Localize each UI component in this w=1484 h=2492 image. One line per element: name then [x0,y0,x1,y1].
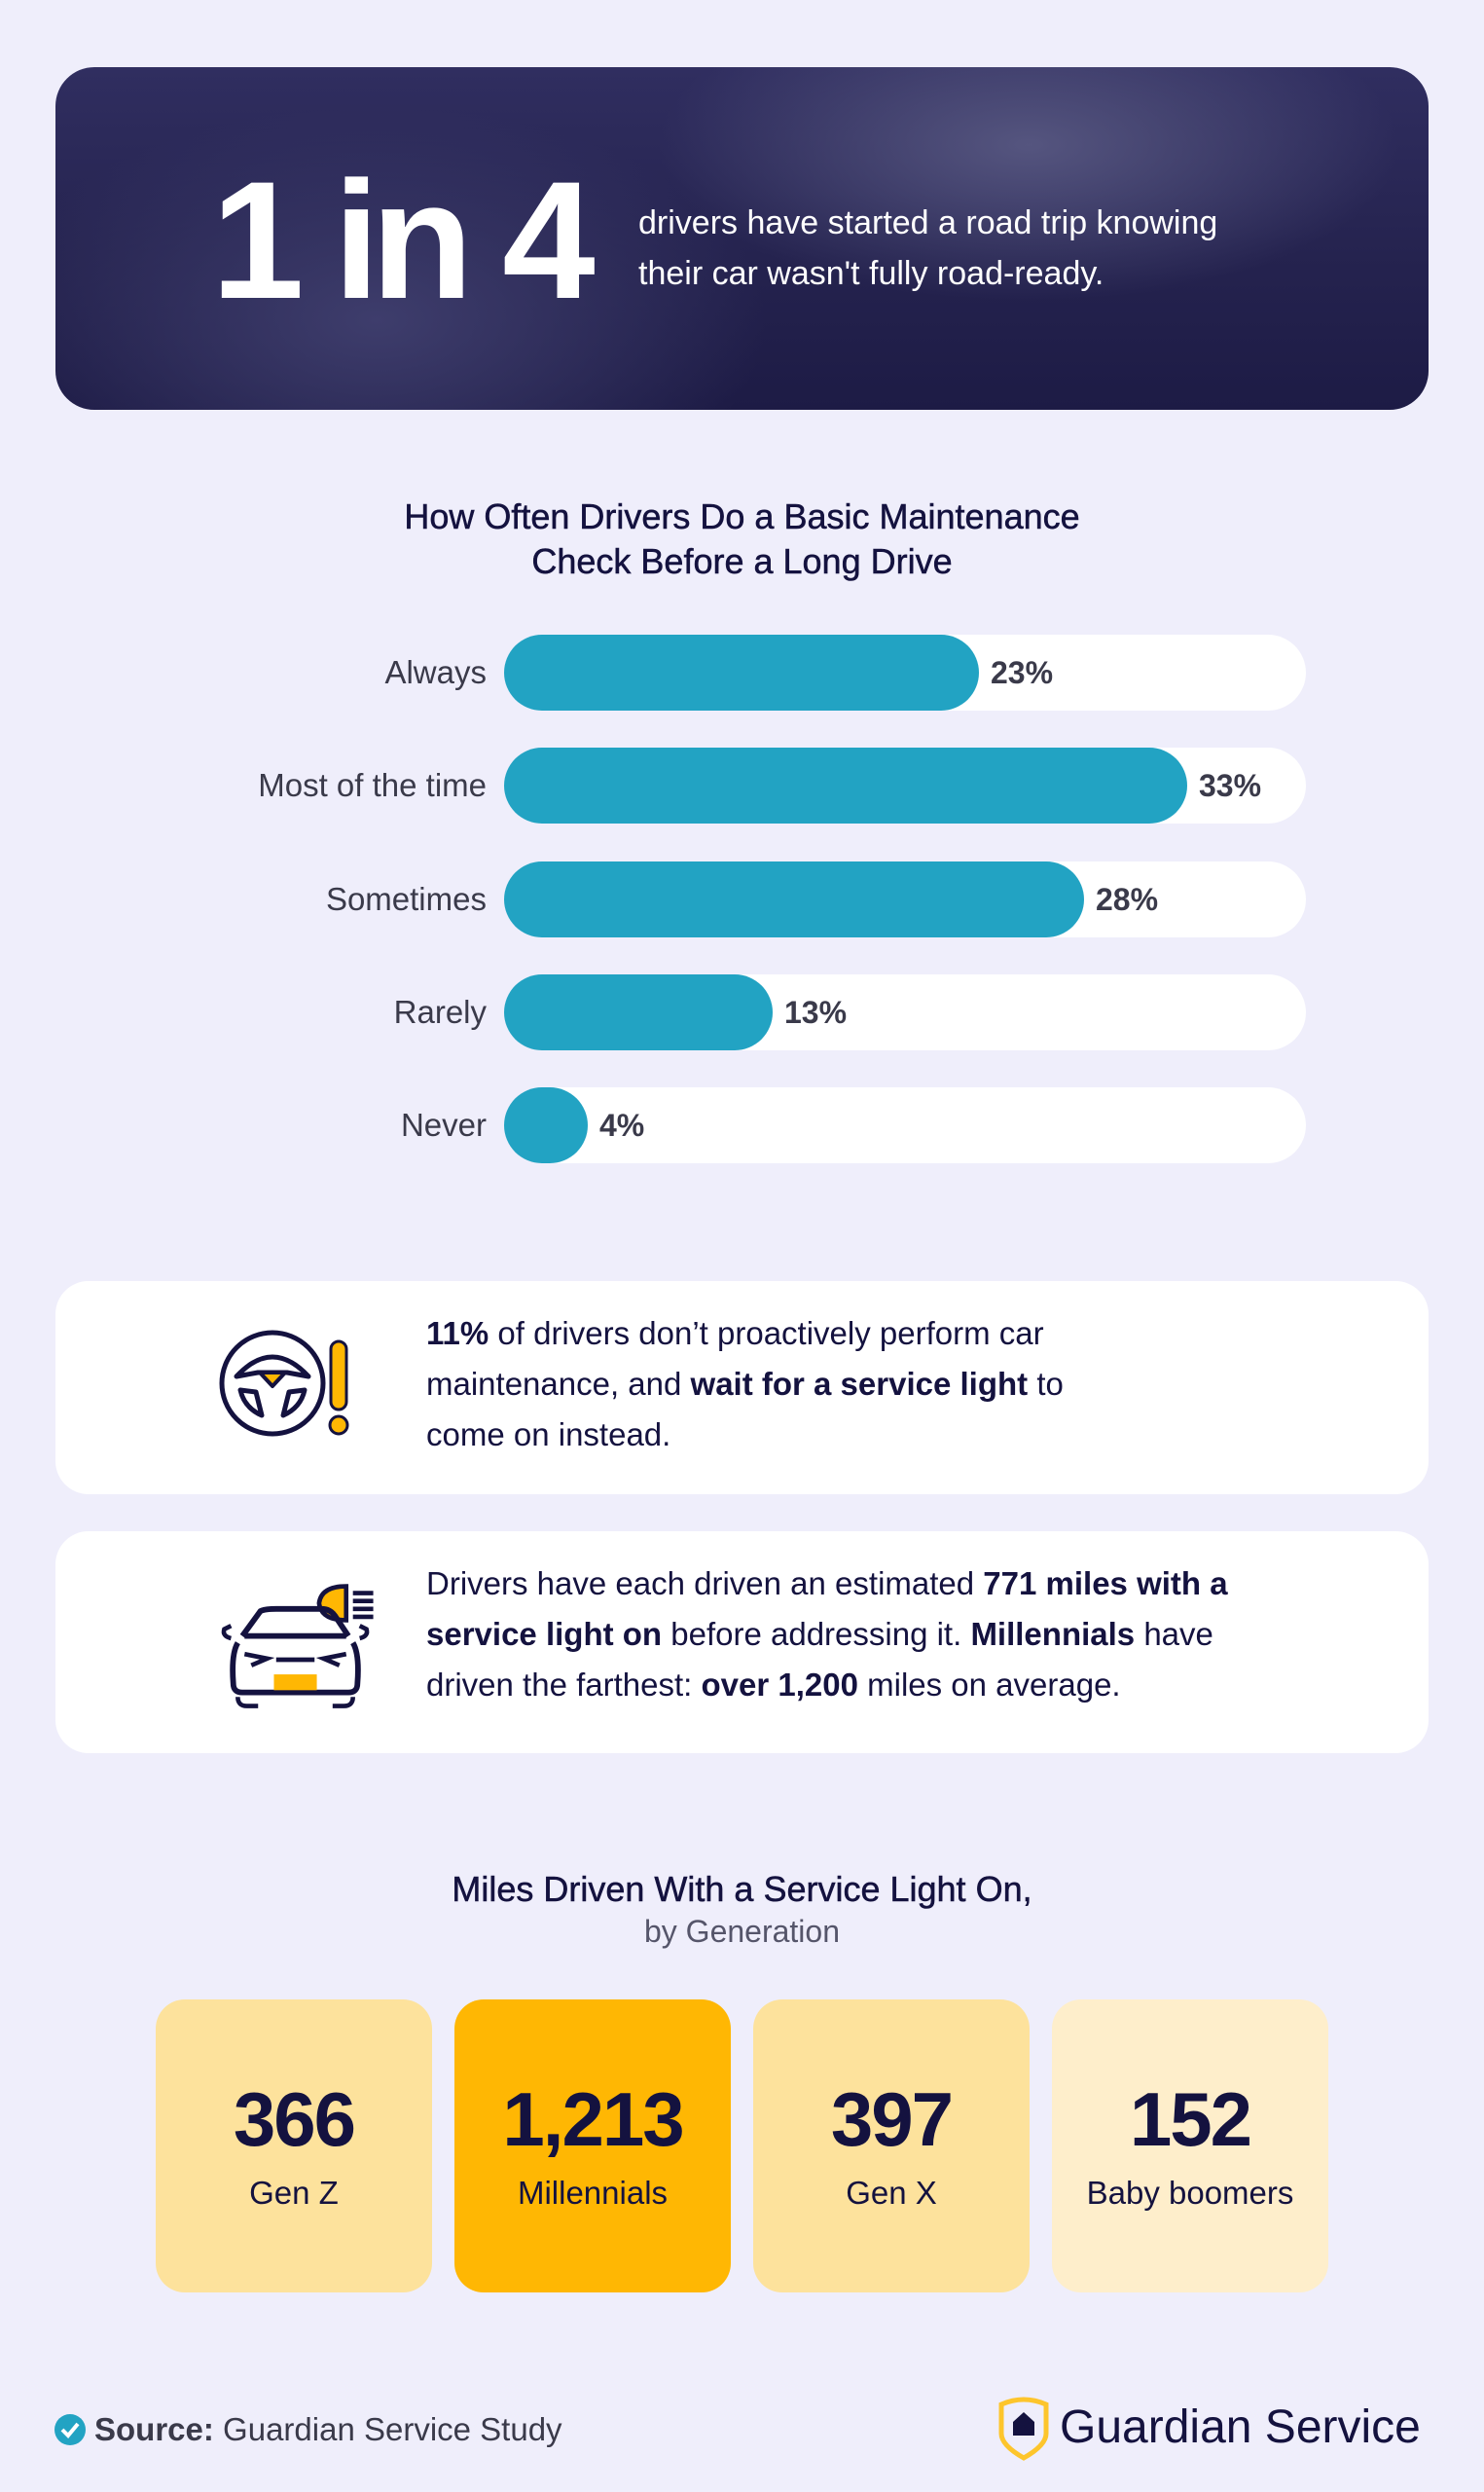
icon: steering wheel with exclamation [220,1330,348,1437]
logo [998,2397,1421,2461]
bar: Never: 4% [599,1108,644,1143]
card: service light [55,1281,1429,1494]
source: Source: Guardian Service Study [94,2411,562,2447]
bar: Always [384,635,1306,711]
stat box: Baby boomers [1052,1999,1328,2292]
stat box: Gen X: Gen X [846,2175,937,2211]
stat box: Gen Z [156,1999,432,2292]
bar: Rarely [394,974,1306,1050]
card text [426,1315,1064,1452]
bar: Sometimes: 28% [1096,882,1158,917]
bar: Always: Always [384,654,487,690]
miles title: by Generation [644,1914,840,1949]
stat box: Gen Z: Gen Z [249,2175,339,2211]
bar chart [258,635,1306,1163]
bar: Rarely: 13% [784,995,847,1030]
stat box: Baby boomers: Baby boomers [1087,2175,1293,2211]
hero text [638,204,1217,292]
stat box: Millennials: 1,213 [502,2076,683,2162]
card text: come on instead. [426,1416,670,1452]
stat box: Gen X: 397 [831,2076,952,2162]
headline stat: 1 in 4 [211,147,587,334]
bar: Rarely: Rarely [394,994,487,1030]
bar: Always: 23% [991,655,1053,690]
card text: 11% of drivers don’t proactively perform car [426,1315,1044,1351]
miles title [452,1869,1032,1949]
icon: car with headlight [222,1584,374,1708]
chart title [404,496,1080,581]
icon: shield [998,2397,1049,2461]
hero banner [55,67,1429,410]
stat box: Baby boomers: 152 [1130,2076,1250,2162]
bar: Sometimes [326,861,1306,937]
bar: Most of the time: Most of the time [258,767,487,803]
card text [426,1565,1228,1703]
bar: Most of the time: 33% [1199,768,1261,803]
bar: Never [401,1087,1306,1163]
miles title: Miles Driven With a Service Light On, [452,1869,1032,1909]
icon: check [54,2414,86,2445]
logo: Guardian Service [1060,2401,1421,2453]
chart title: Check Before a Long Drive [531,541,953,581]
card: miles driven [55,1531,1429,1753]
hero text: their car wasn't fully road-ready. [638,255,1104,292]
bar: Sometimes: Sometimes [326,881,487,917]
bar: Most of the time [258,748,1306,824]
hero text: drivers have started a road trip knowing [638,204,1217,241]
card text: maintenance, and wait for a service light to [426,1366,1064,1402]
card text: driven the farthest: over 1,200 miles on average. [426,1667,1121,1703]
bar: Never: Never [401,1107,487,1143]
stat box: Gen X [753,1999,1030,2292]
card text: Drivers have each driven an estimated 771 miles with a [426,1565,1228,1601]
card text: service light on before addressing it. Millennials have [426,1616,1213,1652]
stat box: Millennials: Millennials [518,2175,668,2211]
chart title: How Often Drivers Do a Basic Maintenance [404,496,1080,536]
stat box: Gen Z: 366 [234,2076,354,2162]
stat box: Millennials [454,1999,731,2292]
